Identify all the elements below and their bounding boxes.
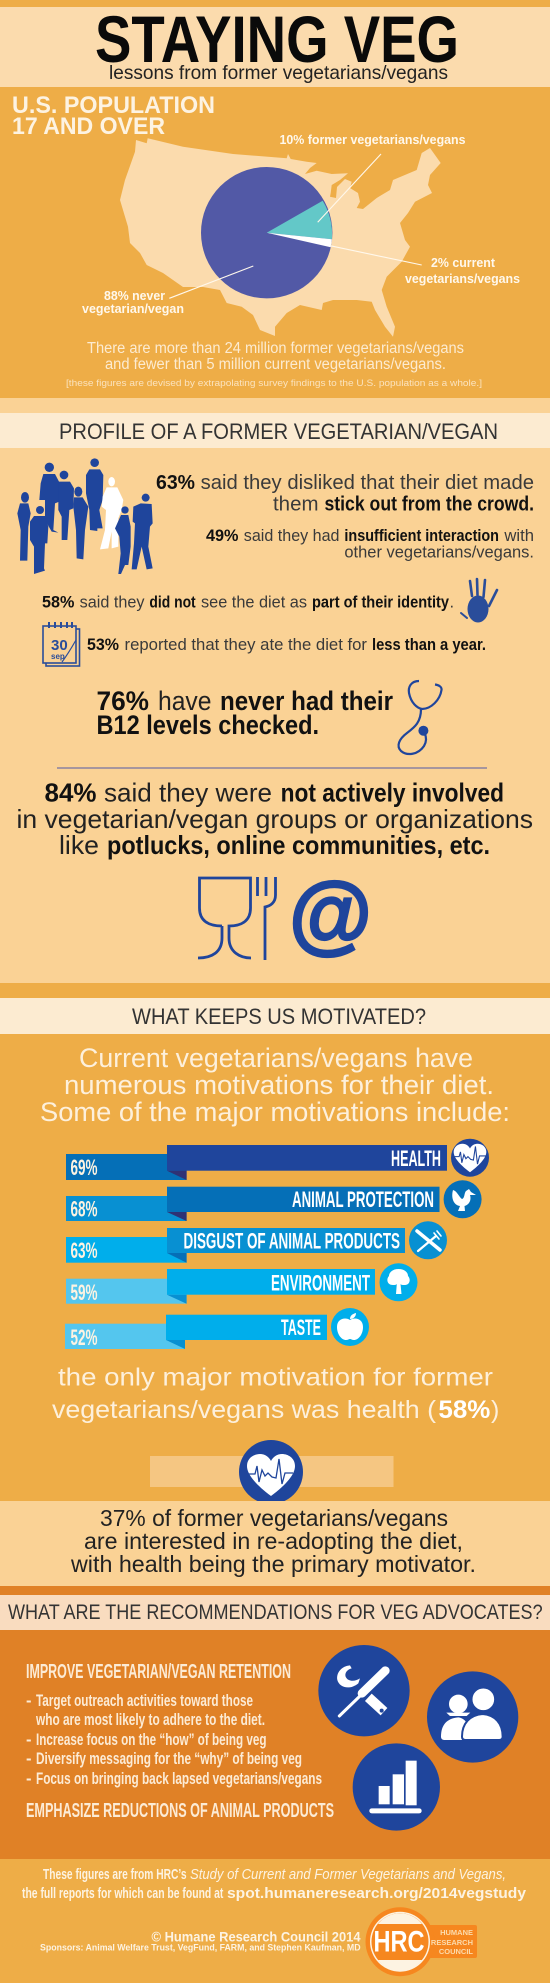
stat: 58% identity (42, 594, 454, 612)
ribbon chart of motivations (65, 1139, 489, 1350)
icon: heart badge (150, 1440, 394, 1504)
former vegetarian motivation text: vegetarians/vegans was health ( (52, 1396, 437, 1424)
population statement: and fewer than 5 million current vegetarians/vegans. (105, 356, 446, 373)
stat: 53% less than a year: 53% (87, 636, 119, 654)
panel: recommendations (0, 1586, 550, 1859)
ribbon: disgust of animal products 63%: DISGUST OF ANIMAL PRODUCTS (184, 1229, 400, 1254)
ribbon: environment 59%: 59% (70, 1280, 98, 1305)
population statement: There are more than 24 million former vegetarians/vegans (87, 340, 464, 357)
former vegetarian motivation text: ) (491, 1396, 499, 1424)
emphasize heading: EMPHASIZE REDUCTIONS OF ANIMAL PRODUCTS (26, 1800, 334, 1822)
panel heading: U.S. POPULATION (12, 92, 215, 119)
stat: 84% not actively involved: not actively involved (281, 778, 504, 808)
retention bullet list: Increase focus on the “how” of being veg (36, 1731, 266, 1749)
pie labels: 2% current (431, 256, 496, 270)
panel: U.S. population (0, 87, 550, 398)
stat: 58% identity: 58% (42, 594, 75, 612)
former vegetarian motivation text (52, 1364, 499, 1424)
retention bullet list: Target outreach activities toward those (36, 1692, 253, 1710)
ribbon: environment 59%: ENVIRONMENT (271, 1271, 370, 1296)
section heading band: WHAT KEEPS US MOTIVATED? (132, 1004, 426, 1029)
stat: 76% B12: have (158, 686, 212, 716)
stat: 49% insufficient interaction (206, 527, 534, 562)
title: STAYING VEG (95, 2, 459, 76)
icon: at sign: @ (289, 865, 372, 962)
retention bullet list: - (26, 1770, 32, 1788)
population statement (87, 340, 464, 373)
section heading band: PROFILE OF A FORMER VEGETARIAN/VEGAN (59, 419, 498, 444)
stat: 49% insufficient interaction: with (503, 527, 534, 545)
icon: glass and fork (198, 877, 276, 960)
stat: 76% B12: 76% (96, 686, 149, 716)
icon: people (427, 1671, 518, 1763)
panel: re-adoption statement (0, 1501, 550, 1586)
panel: re-adoption statement: with health being the primary motivator. (70, 1551, 476, 1577)
icon: bar chart (353, 1743, 440, 1831)
ribbon: animal protection 68%: ANIMAL PROTECTION (292, 1187, 434, 1212)
stat: 63% stick out: said they disliked that their diet made (201, 472, 534, 494)
logo: HRC: HRC (374, 1926, 424, 1959)
stat: 84% not actively involved: said they were (104, 778, 272, 808)
stat: 76% B12: B12 levels checked. (96, 710, 319, 740)
ribbon: taste 52%: 52% (70, 1325, 98, 1350)
stat: 84% not actively involved: like (59, 830, 99, 860)
logo: HRC: HUMANE (440, 1928, 473, 1937)
pie chart (201, 167, 332, 298)
stat: 49% insufficient interaction: insufficient interaction (344, 527, 499, 545)
stat: 53% less than a year (87, 636, 486, 654)
stat: 63% stick out: them (273, 494, 318, 516)
panel: footer (0, 1859, 550, 1983)
stat: 58% identity: . (450, 594, 454, 612)
section heading band (0, 1595, 550, 1630)
ribbon: taste 52%: TASTE (281, 1315, 321, 1340)
ribbon: taste 52% (65, 1308, 369, 1350)
stat: 53% less than a year: less than a year. (372, 636, 486, 654)
pie labels: 10% former vegetarians/vegans (280, 133, 466, 147)
retention heading: IMPROVE VEGETARIAN/VEGAN RETENTION (26, 1661, 291, 1683)
stat: 58% identity: said they (80, 594, 145, 612)
icon: hand print (461, 579, 497, 622)
stat: 49% insufficient interaction: other vegetarians/vegans. (344, 544, 534, 562)
ribbon: animal protection 68%: 68% (70, 1197, 98, 1222)
stat: 63% stick out (156, 472, 534, 516)
pie labels: vegetarian/vegan (82, 302, 184, 316)
retention bullet list: - (26, 1731, 32, 1749)
stat: 84% not actively involved: potlucks, online communities, etc. (107, 830, 490, 860)
motivation intro text (40, 1043, 510, 1127)
title banner (0, 2, 550, 87)
section heading band (0, 998, 550, 1034)
motivation intro text: Current vegetarians/vegans have (79, 1043, 473, 1073)
ribbon: animal protection 68% (66, 1180, 482, 1222)
logo: HRC: RESEARCH (431, 1938, 473, 1947)
footnote: [these figures are devised by extrapolating survey findings to the U.S. population as a whole.] (66, 378, 482, 389)
map of the United States (120, 138, 441, 337)
source note: spot.humaneresearch.org/2014vegstudy (227, 1885, 527, 1902)
source note (22, 1866, 527, 1902)
pie labels: vegetarians/vegans (405, 272, 520, 286)
stat: 58% identity: part of their identity (312, 594, 450, 612)
former vegetarian motivation text: 58% (438, 1396, 490, 1424)
motivation intro text: Some of the major motivations include: (40, 1097, 510, 1127)
icon: calendar: sep (51, 652, 65, 661)
retention bullet list: Focus on bringing back lapsed vegetarians/vegans (36, 1770, 322, 1788)
stat: 58% identity: did not (149, 594, 196, 612)
former vegetarian motivation text: the only major motivation for former (58, 1364, 493, 1392)
retention bullet list: - (26, 1750, 32, 1768)
ribbon: environment 59% (66, 1263, 418, 1305)
section heading band (0, 413, 550, 448)
ribbon: health 69% (66, 1139, 489, 1180)
panel heading (12, 92, 215, 140)
panel: re-adoption statement: are interested in re-adopting the diet, (84, 1528, 463, 1554)
retention bullet list: who are most likely to adhere to the diet. (35, 1711, 265, 1729)
icon: calendar: 30 (51, 637, 68, 654)
icon: stethoscope (399, 681, 442, 754)
pie labels: 88% never (104, 289, 165, 303)
ribbon: disgust of animal products 63%: 63% (70, 1238, 98, 1263)
stat: 53% less than a year: reported that they ate the diet for (124, 636, 368, 654)
stat: 84% not actively involved (16, 778, 533, 860)
icon: tools (318, 1645, 410, 1736)
stat: 49% insufficient interaction: 49% (206, 527, 239, 545)
motivation intro text: numerous motivations for their diet. (64, 1070, 494, 1100)
panel heading: 17 AND OVER (12, 113, 165, 140)
stat: 84% not actively involved: 84% (44, 778, 96, 808)
copyright: © Humane Research Council 2014 (152, 1929, 361, 1945)
stat: 63% stick out: 63% (156, 472, 195, 494)
retention bullet list: Diversify messaging for the “why” of being veg (36, 1750, 302, 1768)
ribbon: health 69%: 69% (70, 1155, 98, 1180)
panel: what keeps us motivated (0, 983, 550, 1504)
retention bullet list (26, 1692, 322, 1788)
stat: 58% identity: see the diet as (201, 594, 307, 612)
pie labels (82, 133, 520, 316)
stat: 84% not actively involved: in vegetarian/vegan groups or organizations (16, 804, 533, 834)
stat: 76% B12: never had their (220, 686, 393, 716)
logo: HRC: COUNCIL (439, 1947, 473, 1956)
source note: These figures are from HRC’s (43, 1866, 187, 1883)
stat: 49% insufficient interaction: said they had (244, 527, 340, 545)
ribbon: health 69%: HEALTH (391, 1146, 441, 1171)
source note: Study of Current and Former Vegetarians and Vegans, (190, 1866, 506, 1883)
sponsors: Sponsors: Animal Welfare Trust, VegFund, FARM, and Stephen Kaufman, MD (40, 1942, 361, 1952)
icon: crowd of people (17, 458, 153, 574)
retention bullet list: - (26, 1692, 32, 1710)
source note: the full reports for which can be found at (22, 1885, 223, 1902)
logo: HRC (366, 1907, 477, 1976)
stat: 76% B12 (96, 686, 393, 740)
leader lines (169, 154, 422, 298)
icon: calendar (43, 622, 80, 666)
ribbon: disgust of animal products 63% (66, 1221, 447, 1263)
subtitle: lessons from former vegetarians/vegans (109, 62, 448, 84)
panel: re-adoption statement: 37% of former vegetarians/vegans (100, 1505, 448, 1531)
panel: profile of a former vegetarian/vegan (0, 398, 550, 983)
